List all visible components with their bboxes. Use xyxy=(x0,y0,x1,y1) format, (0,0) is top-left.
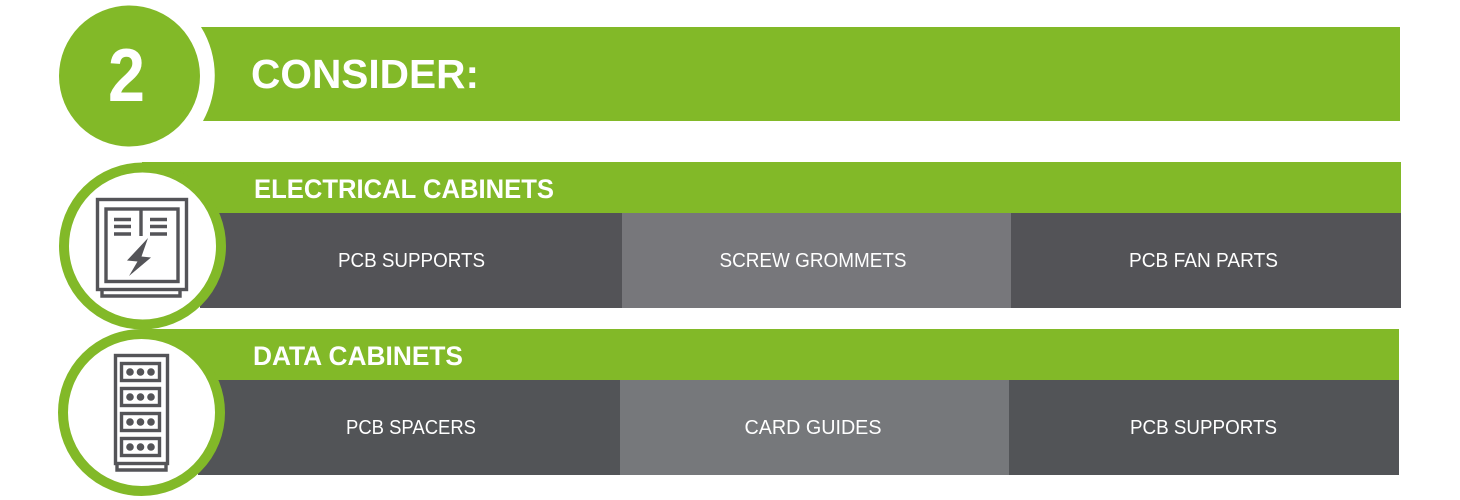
cell: PCB supports: PCB SUPPORTS xyxy=(338,250,485,272)
cell: PCB supports xyxy=(1009,380,1399,475)
section header bar xyxy=(141,329,1399,380)
section header bar xyxy=(142,162,1401,213)
cell: screw grommets xyxy=(622,213,1011,308)
banner bar xyxy=(201,27,1400,121)
cell: PCB supports: PCB SUPPORTS xyxy=(1130,417,1277,439)
icon: data rack xyxy=(116,356,168,470)
panel: electrical cabinets xyxy=(64,162,1401,324)
icon circle xyxy=(64,168,221,324)
cell: PCB fan parts: PCB FAN PARTS xyxy=(1129,250,1278,272)
number circle xyxy=(59,6,200,146)
icon: electrical cabinet xyxy=(98,200,186,296)
cell: PCB supports xyxy=(200,213,622,308)
heading: CONSIDER: xyxy=(251,51,479,97)
cell: card guides: CARD GUIDES xyxy=(744,417,882,439)
cell: PCB fan parts xyxy=(1011,213,1401,308)
header banner xyxy=(59,6,1400,146)
cell: card guides xyxy=(620,380,1009,475)
cell: PCB spacers xyxy=(198,380,620,475)
section title: ELECTRICAL CABINETS xyxy=(254,174,554,204)
step number: 2 xyxy=(108,33,145,117)
icon circle xyxy=(63,334,220,491)
cell: screw grommets: SCREW GROMMETS xyxy=(720,250,906,272)
cell: PCB spacers: PCB SPACERS xyxy=(346,417,476,439)
panel: data cabinets xyxy=(63,329,1399,491)
section title: DATA CABINETS xyxy=(253,341,463,371)
